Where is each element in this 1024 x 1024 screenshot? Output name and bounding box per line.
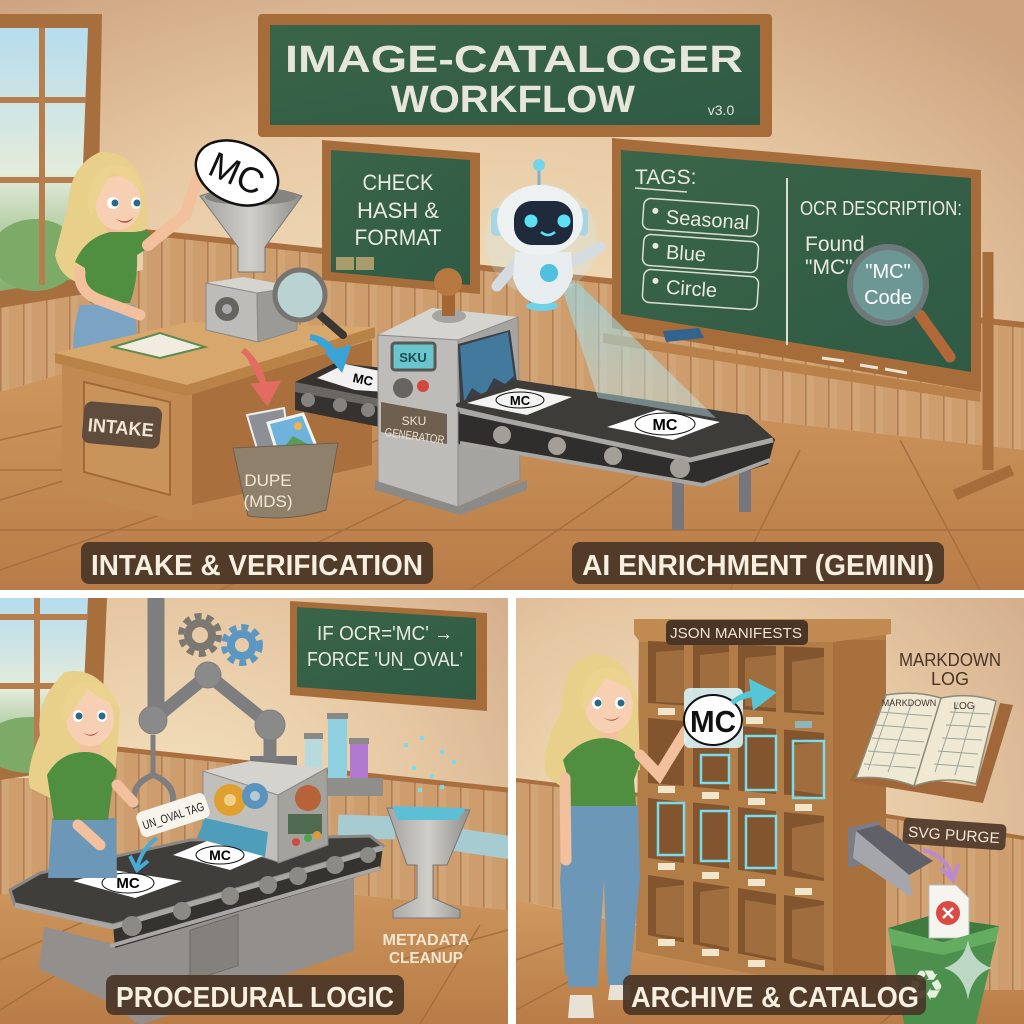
- icon: open log book: MARKDOWN: [882, 698, 936, 708]
- tag: seasonal: Seasonal: [665, 207, 750, 234]
- person procedural: [29, 671, 133, 878]
- conveyor: [10, 836, 383, 981]
- OCR chalkboard: [603, 138, 1012, 495]
- recycling bin: [888, 885, 999, 1024]
- intake label: INTAKE: [87, 415, 154, 442]
- sheet on desk: [113, 333, 205, 358]
- OCR text: [800, 201, 960, 274]
- OCR text: Found: [805, 233, 865, 256]
- SKU generator label: SKU: [402, 414, 426, 428]
- tag: blue: [642, 234, 759, 273]
- check text: FORMAT: [354, 225, 442, 250]
- arrow to trash: [243, 350, 276, 401]
- icon: magnifier over code: Code: [864, 287, 912, 309]
- left conveyor segment: [295, 364, 378, 426]
- heading: AI enrichment: AI ENRICHMENT (GEMINI): [582, 550, 934, 582]
- tags heading: TAGS:: [635, 166, 696, 189]
- paper with MC: MC: [653, 417, 678, 434]
- rule text: IF OCR='MC' →: [317, 623, 453, 645]
- shelf: [634, 619, 891, 990]
- paper with MC: [173, 841, 263, 870]
- mds label: (MDS): [243, 492, 293, 511]
- OCR text: OCR DESCRIPTION:: [800, 198, 962, 220]
- check hash chalkboard: [322, 140, 480, 294]
- tag: blue: Blue: [665, 242, 707, 266]
- SVG purge label: SVG PURGE: [907, 824, 1000, 847]
- check text: CHECK: [362, 170, 434, 195]
- icon: gears: [181, 616, 260, 663]
- arrow to bin: [923, 850, 958, 880]
- AI beam: [561, 283, 716, 418]
- title chalkboard: [258, 14, 772, 137]
- markdown log label: LOG: [931, 669, 969, 689]
- paper with MC: MC: [351, 370, 375, 389]
- rule chalkboard: [290, 601, 487, 711]
- verification machine: [200, 187, 343, 342]
- icon: open log book: [849, 693, 1013, 803]
- dupe label: DUPE: [244, 471, 292, 490]
- conveyor with papers: [458, 382, 773, 530]
- JSON manifests label: [666, 620, 808, 645]
- window: [0, 14, 102, 308]
- un_oval tag: UN_OVAL TAG: [141, 799, 206, 832]
- icon: rejected file: [929, 885, 969, 938]
- metadata cleanup label: [382, 932, 470, 967]
- OCR text: "MC": [805, 256, 853, 279]
- person at intake: [55, 152, 200, 350]
- rule text: [307, 623, 463, 671]
- metadata cleanup label: METADATA: [382, 932, 470, 949]
- icon: open log book: LOG: [953, 701, 975, 712]
- paper with MC: MC: [510, 393, 531, 408]
- metadata pipe and funnel: [338, 738, 512, 918]
- title text: [288, 46, 742, 115]
- SVG purge label: [902, 817, 1007, 851]
- check text: [356, 174, 441, 245]
- heading: archive and catalog: ARCHIVE & CATALOG: [631, 982, 919, 1014]
- paper with MC: MC: [116, 875, 140, 892]
- icon: magnifier over code: [850, 247, 950, 357]
- intake label: [81, 401, 163, 449]
- tag: circle: Circle: [665, 277, 718, 302]
- title text: IMAGE-CATALOGER: [285, 39, 743, 81]
- title text: WORKFLOW: [391, 79, 635, 121]
- icon: glowing MC oval: MC: [690, 704, 736, 739]
- markdown log label: [899, 650, 1001, 689]
- un_oval tag: [135, 792, 211, 838]
- JSON manifests label: JSON MANIFESTS: [670, 625, 802, 642]
- heading: procedural logic: PROCEDURAL LOGIC: [116, 982, 394, 1014]
- tag: circle: [642, 269, 759, 310]
- check text: HASH &: [357, 198, 439, 223]
- desk: [55, 322, 375, 520]
- panel: intake and AI enrichment scene: [0, 0, 1024, 590]
- arrow to conveyor: [310, 337, 347, 367]
- table: [40, 875, 353, 1024]
- recycling bin: ♻: [907, 962, 945, 1009]
- metadata cleanup label: CLEANUP: [389, 950, 463, 967]
- SKU generator label: [381, 402, 447, 447]
- SKU generator machine: SKU: [399, 350, 427, 365]
- processing machine: [197, 713, 383, 863]
- arrow down to paper: [130, 838, 157, 870]
- SKU generator machine: [375, 268, 527, 515]
- panel: archive and catalog scene: [516, 598, 1024, 1024]
- icon: magnifier: [275, 270, 343, 335]
- icon: glowing MC oval: [684, 688, 743, 748]
- paper with MC: [607, 410, 720, 440]
- icon: robot: [485, 159, 600, 311]
- panel: procedural logic scene: [0, 598, 512, 1024]
- paper with MC: [467, 388, 572, 415]
- window: [0, 598, 107, 780]
- stamp: [432, 268, 466, 323]
- tag: seasonal: [642, 198, 759, 237]
- purge chute: [848, 821, 933, 898]
- markdown log label: MARKDOWN: [899, 650, 1001, 670]
- rule text: FORCE 'UN_OVAL': [307, 649, 463, 671]
- arrow: [732, 683, 772, 706]
- heading: intake and verification: INTAKE & VERIFICATION: [91, 550, 423, 582]
- paper with MC: [73, 870, 182, 898]
- person archive: [545, 655, 686, 1018]
- icon: MC oval top: MC: [203, 143, 271, 204]
- robot arm: [134, 598, 285, 808]
- dupe bin: [233, 408, 338, 518]
- title text: v3.0: [708, 102, 734, 118]
- SKU generator label: GENERATOR: [384, 425, 445, 447]
- paper with MC: MC: [209, 847, 231, 863]
- icon: magnifier over code: "MC": [865, 261, 911, 283]
